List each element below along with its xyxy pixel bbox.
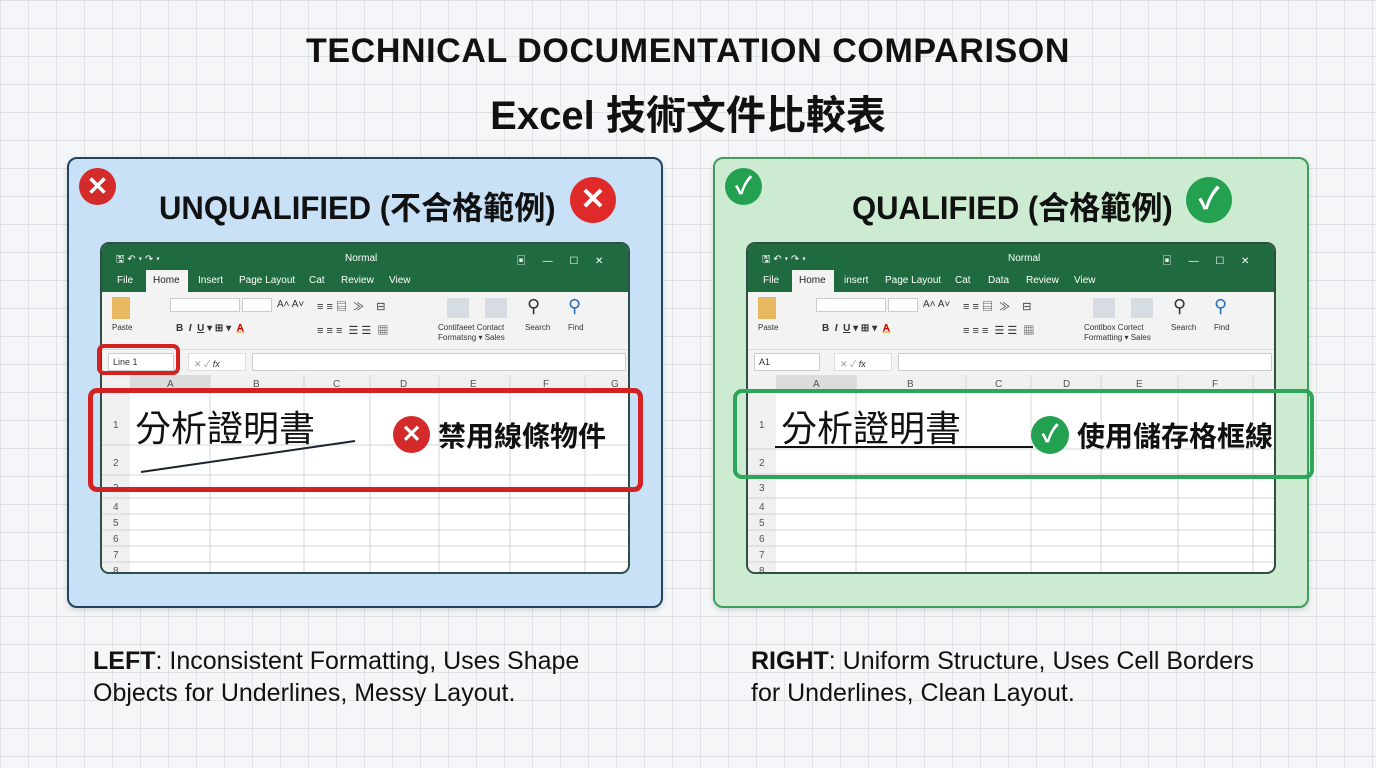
excel window left: View: [389, 275, 410, 286]
excel window right: ⚲: [1214, 296, 1227, 316]
icon: green check corner: ✓: [735, 173, 752, 200]
excel window left: ⚲: [527, 296, 540, 316]
excel window left: [100, 242, 630, 574]
excel window left: ≡ ≡ ≡ ☰ ☰ ▦: [317, 325, 388, 337]
grid: 1: [759, 420, 765, 431]
icon: red x callout: [393, 416, 430, 453]
icon: red x callout: ✕: [401, 421, 422, 448]
grid: 7: [113, 550, 119, 561]
excel window left: ▣ — ☐ ✕: [516, 256, 603, 267]
excel window right: B I U ▾ ⊞ ▾: [822, 323, 877, 334]
excel window left: A: [237, 323, 244, 334]
excel window left: 🖫 ↶ ▾ ↷ ▾: [116, 254, 160, 265]
excel window right: Contlbox Cortect: [1084, 323, 1144, 332]
grid: D: [400, 379, 407, 390]
excel window right: 🖫 ↶ ▾ ↷ ▾: [762, 254, 806, 265]
subtitle: Excel 技術文件比較表: [490, 94, 886, 138]
grid: [748, 375, 1274, 574]
icon: green check corner: [725, 168, 762, 205]
grid: 3: [113, 483, 119, 494]
grid: A: [167, 379, 174, 390]
grid: C: [333, 379, 340, 390]
excel window left: Formatsng ▾ Sales: [438, 333, 505, 342]
text: cell content right: 分析證明書: [781, 408, 961, 449]
icon: green check heading: ✓: [1198, 183, 1220, 216]
grid: B: [253, 379, 260, 390]
grid: E: [1136, 379, 1143, 390]
shape line: [140, 440, 356, 473]
excel window right: ≡ ≡ ≡ ☰ ☰ ▦: [963, 325, 1034, 337]
icon: red x heading: ✕: [580, 183, 606, 216]
excel window right: ≡ ≡ ▤ ≫ ⊟: [963, 301, 1032, 313]
excel window right: File: [763, 275, 779, 286]
excel window left: File: [117, 275, 133, 286]
icon: red x corner: ✕: [87, 171, 108, 201]
excel window left: A˄ A˅: [277, 299, 304, 310]
excel window left: B I U ▾ ⊞ ▾: [176, 323, 231, 334]
excel window right: ✕ ✓ fx: [840, 359, 866, 369]
excel window right: A: [883, 323, 890, 334]
excel window right: ▣ — ☐ ✕: [1162, 256, 1249, 267]
grid: 4: [759, 502, 765, 513]
panel heading: QUALIFIED (合格範例): [852, 190, 1173, 226]
text block: right description: for Underlines, Clean Layout.: [751, 679, 1075, 707]
excel window right: Find: [1214, 323, 1230, 332]
panel heading: UNQUALIFIED (不合格範例): [159, 190, 556, 226]
excel window right: ⚲: [1173, 296, 1186, 316]
grid: A: [813, 379, 820, 390]
title: TECHNICAL DOCUMENTATION COMPARISON: [306, 32, 1070, 70]
excel window left: Cat: [309, 275, 325, 286]
text: forbidden shapes: 禁用線條物件: [438, 421, 606, 452]
text: cell content left: 分析證明書: [135, 408, 315, 449]
excel window right: View: [1074, 275, 1096, 286]
excel window left: Find: [568, 323, 584, 332]
excel window left: ≡ ≡ ▤ ≫ ⊟: [317, 301, 386, 313]
icon: green check callout: ✓: [1041, 421, 1059, 448]
grid: F: [1212, 379, 1218, 390]
text block: left description: LEFT: Inconsistent Formatting, Uses Shape: [93, 647, 579, 675]
callout: red highlight rows: [88, 388, 643, 492]
panel: qualified: [713, 157, 1309, 608]
excel window left: Insert: [198, 275, 223, 286]
callout: red name box: [97, 344, 180, 375]
excel window left: Review: [341, 275, 374, 286]
grid: 6: [759, 534, 765, 545]
grid: 5: [113, 518, 119, 529]
grid: 3: [759, 483, 765, 494]
grid: 4: [113, 502, 119, 513]
icon: red x corner: [79, 168, 116, 205]
excel window left: ⚲: [568, 296, 581, 316]
text block: left description: [93, 647, 579, 707]
excel window right: Page Layout: [885, 275, 941, 286]
text: use cell borders: 使用儲存格框線: [1077, 421, 1273, 452]
excel window left: ◬: [237, 323, 244, 334]
grid: 2: [759, 458, 765, 469]
grid: 6: [113, 534, 119, 545]
excel window right: insert: [844, 275, 868, 286]
excel window left: Home: [153, 275, 180, 286]
excel window left: Normal: [345, 253, 377, 264]
excel window right: ◬: [883, 323, 890, 334]
panel: unqualified: [67, 157, 663, 608]
grid: B: [907, 379, 914, 390]
grid: D: [1063, 379, 1070, 390]
grid: 2: [113, 458, 119, 469]
callout: green highlight rows: [733, 389, 1314, 479]
text block: right description: [751, 647, 1254, 707]
text block: left description: Objects for Underlines, Messy Layout.: [93, 679, 515, 707]
excel window left: Page Layout: [239, 275, 295, 286]
excel window right: Review: [1026, 275, 1059, 286]
grid: 5: [759, 518, 765, 529]
excel window right: Formatting ▾ Sales: [1084, 333, 1151, 342]
icon: green check heading: [1186, 177, 1232, 223]
grid: 1: [113, 420, 119, 431]
excel window right: Cat: [955, 275, 971, 286]
excel window left: Paste: [112, 323, 132, 332]
grid: 7: [759, 550, 765, 561]
grid: F: [543, 379, 549, 390]
excel window right: Home: [799, 275, 826, 286]
grid: G: [611, 379, 619, 390]
cell border underline: [775, 446, 1033, 448]
excel window right: Data: [988, 275, 1009, 286]
excel window left: ✕ ✓ fx: [194, 359, 220, 369]
excel window left: Contifaeet Contact: [438, 323, 504, 332]
excel window right: Search: [1171, 323, 1196, 332]
excel window left: Line 1: [113, 357, 138, 367]
grid: [102, 375, 628, 574]
excel window right: Paste: [758, 323, 778, 332]
excel window right: Normal: [1008, 253, 1040, 264]
grid: E: [470, 379, 477, 390]
icon: green check callout: [1031, 416, 1069, 454]
text block: right description: RIGHT: Uniform Structure, Uses Cell Borders: [751, 647, 1254, 675]
excel window right: A1: [759, 357, 770, 367]
icon: red x heading: [570, 177, 616, 223]
excel window right: A˄ A˅: [923, 299, 950, 310]
excel window left: Search: [525, 323, 550, 332]
grid: C: [995, 379, 1002, 390]
excel window right: [746, 242, 1276, 574]
